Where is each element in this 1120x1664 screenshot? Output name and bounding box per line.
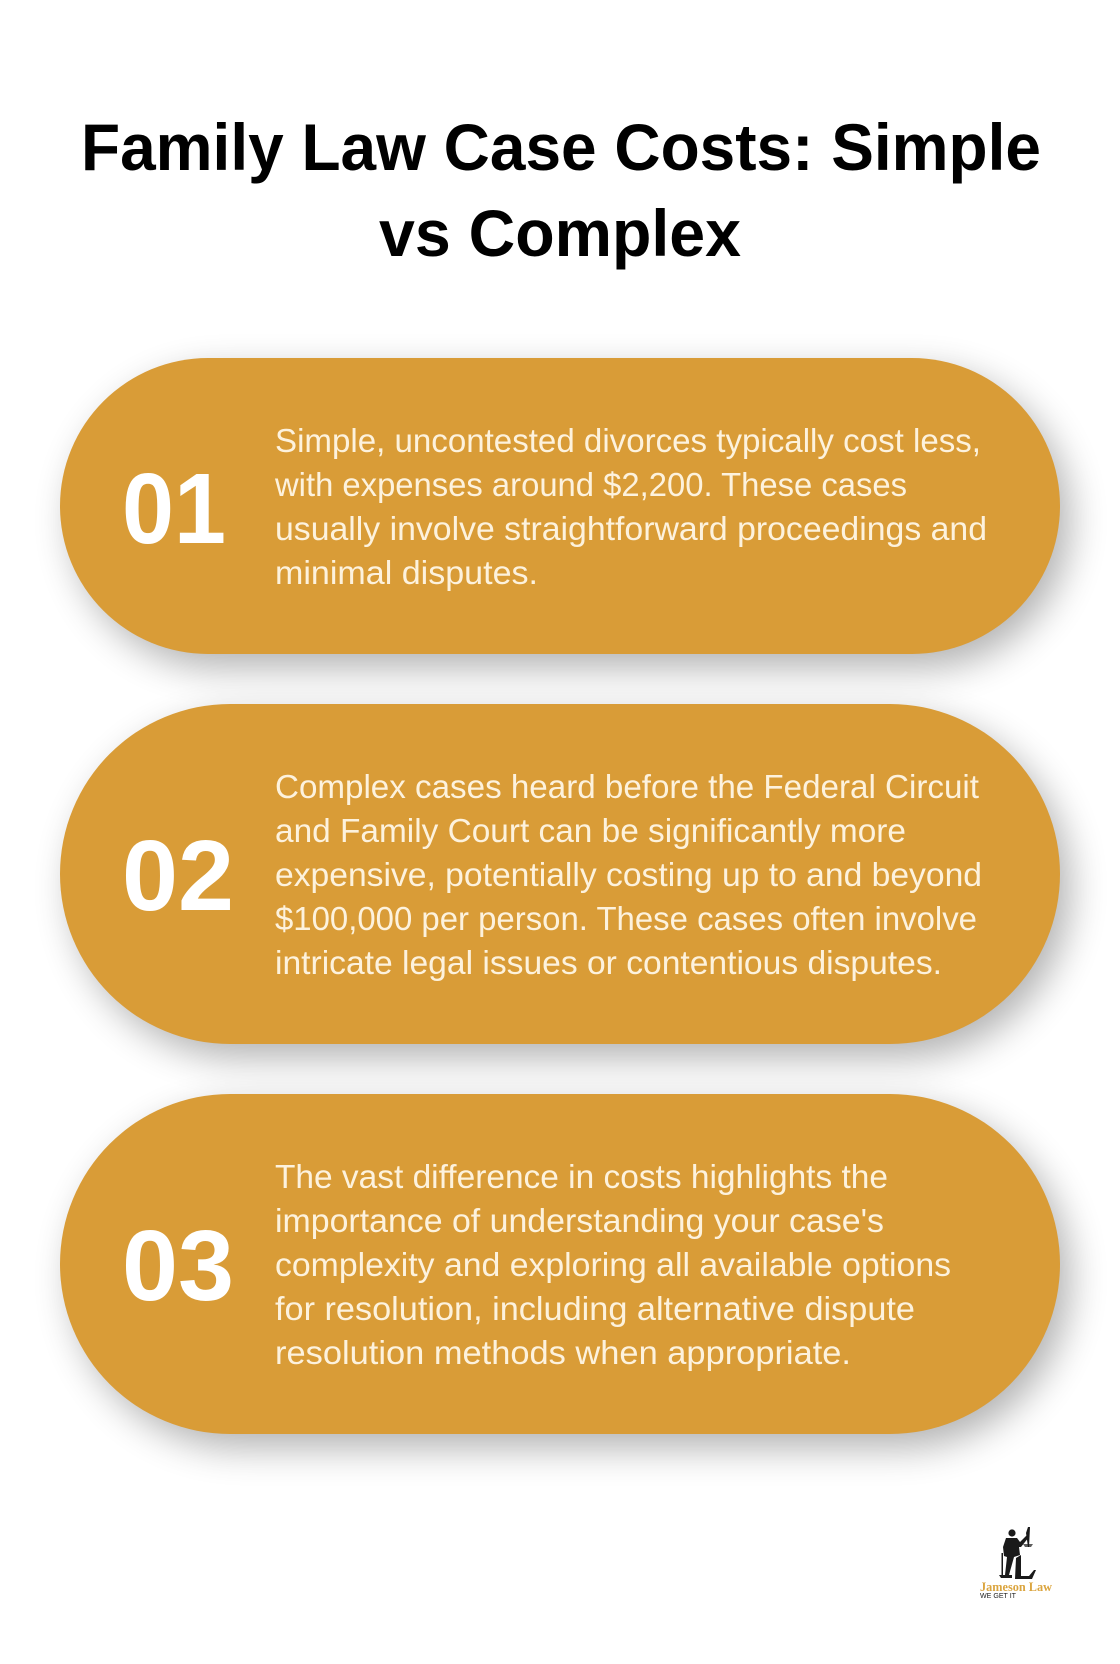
panel: card 03 understanding options [60, 1094, 1070, 1448]
text block 01: Simple, uncontested divorces typically cost less, [275, 422, 981, 459]
logo wordmark: Jameson Law [980, 1580, 1052, 1594]
text block 01 [274, 422, 987, 591]
text block 01: usually involve straightforward proceedings and [275, 510, 987, 547]
title: Family Law Case Costs: Simple [81, 110, 1041, 184]
icon: lady justice figure [999, 1527, 1036, 1579]
number 02: 02 [122, 820, 234, 932]
text block 03 [275, 1158, 951, 1371]
panel: card 01 simple divorces [60, 358, 1070, 668]
text block 03: for resolution, including alternative dispute [275, 1290, 915, 1327]
text block 01: with expenses around $2,200. These cases [274, 466, 907, 503]
text block 02: expensive, potentially costing up to and beyond [275, 856, 982, 893]
title: vs Complex [379, 196, 741, 270]
pill background 02 [60, 704, 1060, 1044]
pill background 03 [60, 1094, 1060, 1434]
pill background 01 [60, 358, 1060, 654]
logo: Jameson Law [980, 1527, 1052, 1600]
text block 02: Complex cases heard before the Federal Circuit [275, 768, 979, 805]
panel: card 02 complex cases [60, 704, 1070, 1058]
text block 01: minimal disputes. [275, 554, 538, 591]
text block 02: $100,000 per person. These cases often involve [275, 900, 977, 937]
text block 02: intricate legal issues or contentious disputes. [275, 944, 942, 981]
logo tagline: WE GET IT [980, 1591, 1016, 1600]
text block 03: complexity and exploring all available options [275, 1246, 951, 1283]
text block 03: importance of understanding your case's [275, 1202, 884, 1239]
number 01: 01 [122, 453, 226, 565]
text block 03: The vast difference in costs highlights the [275, 1158, 888, 1195]
text block 02: and Family Court can be significantly more [275, 812, 906, 849]
text block 03: resolution methods when appropriate. [275, 1334, 851, 1371]
number 03: 03 [122, 1210, 234, 1322]
text block 02 [275, 768, 982, 981]
title [81, 110, 1041, 270]
